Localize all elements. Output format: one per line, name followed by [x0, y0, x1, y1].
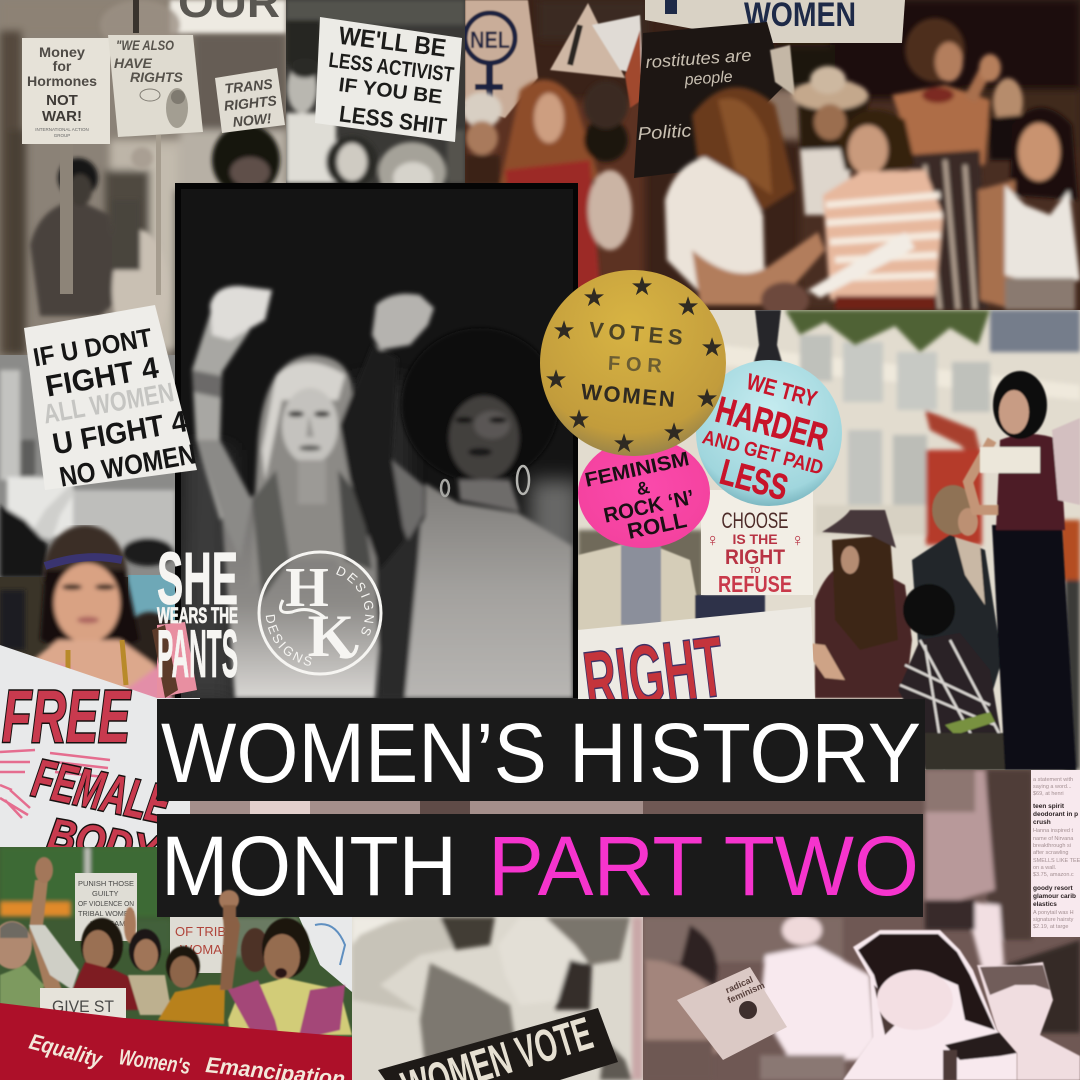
lit shoulder — [390, 458, 424, 540]
magazine text column: signature hairsty — [1033, 917, 1074, 923]
banner: women — [645, 0, 905, 43]
photo: rally with speaker (right) — [578, 310, 1080, 770]
badge: votes for women: WOMEN — [580, 379, 676, 412]
sign: we'll be less activist: WE'LL BE — [337, 22, 448, 63]
sign: choose is the right to refuse: RIGHT — [725, 546, 785, 569]
sign: money for hormones: WAR! — [42, 108, 82, 125]
magazine text column: teen spirit — [1033, 803, 1065, 810]
banner: NEL female symbol — [465, 0, 538, 118]
sign: punish those guilty: IN ASSAM — [90, 919, 125, 928]
sign: money for hormones: NOT — [46, 92, 78, 109]
badge: votes for women: ★ — [544, 364, 568, 394]
sign: if u dont fight 4 all women: NO WOMEN — [57, 438, 198, 493]
sign: punish those guilty: TRIBAL WOMEN — [78, 909, 134, 918]
sign: trans rights now: TRANS — [224, 76, 274, 97]
sign: we'll be less activist: IF YOU BE — [337, 74, 443, 109]
sign: of tribal woman: WOMAN — [180, 942, 231, 957]
woman in purple sari — [262, 918, 310, 978]
person in cream jacket — [578, 544, 698, 630]
left arm and sleeve — [192, 305, 250, 520]
sign: free female body: FEMALE — [28, 748, 176, 836]
right fist — [372, 294, 434, 350]
woman with red hair — [500, 80, 600, 185]
badge: votes for women: ★ — [695, 383, 719, 413]
title bar: women's history: WOMEN’S HISTORY — [161, 706, 921, 800]
sign: punish those guilty: OF VIOLENCE ON — [78, 899, 134, 908]
magazine text column: name of Nirvana — [1033, 836, 1074, 842]
magazine text column: after scrawling — [1033, 850, 1068, 856]
badge: votes for women — [540, 270, 726, 458]
hat woman — [798, 80, 870, 165]
woman in green sari — [0, 965, 44, 1010]
book: radical feminism — [677, 967, 787, 1060]
title bar: month part two: PART TWO — [488, 819, 919, 913]
cut-out: girl with microphone — [843, 930, 1017, 1080]
kneeling person in plaid — [898, 633, 1008, 770]
badge: feminism and rock n roll: & — [635, 477, 651, 499]
blonde face — [282, 388, 338, 464]
logo: HK designs: H — [285, 557, 329, 619]
sign: money for hormones — [22, 38, 110, 144]
blonde hair — [252, 352, 356, 563]
sign: money for hormones: Hormones — [27, 73, 97, 89]
sign: if u dont fight 4 all women: U FIGHT 4 — [50, 405, 190, 461]
sign: punish those guilty — [75, 873, 137, 941]
pink top and strap over frame — [152, 622, 197, 698]
badge: votes for women: ★ — [567, 404, 591, 434]
woman in dark red scarf — [81, 918, 123, 972]
sign: we also have rights: RIGHTS — [130, 69, 184, 85]
photo: activist crowd (top middle) — [286, 0, 465, 202]
photo: central raised fists portrait — [175, 183, 580, 700]
woman behind — [241, 928, 269, 972]
sign: prostitutes are people — [634, 22, 785, 178]
sign: we also have rights: HAVE — [114, 55, 153, 71]
dark right background — [1005, 940, 1080, 1033]
magazine text column: saying a word... — [1033, 784, 1072, 790]
sign: trans rights now: RIGHTS — [223, 92, 278, 114]
book: radical feminism: feminism — [726, 980, 766, 1005]
sign: money for hormones: GROUP — [54, 133, 70, 138]
photo: zine collage (bottom right) — [643, 770, 1080, 1080]
woman in yellow sari — [166, 946, 200, 986]
woman with hat far left — [462, 92, 502, 128]
logo: HK designs: DESIGNS — [336, 566, 374, 636]
sign: money for hormones: for — [53, 58, 72, 74]
right arm sleeve — [340, 345, 405, 570]
magazine text column: on a wall. — [1033, 865, 1057, 871]
magazine text column: glamour carib — [1033, 893, 1076, 900]
badge: we try harder and get paid less: LESS — [716, 451, 792, 508]
magazine text column: goody resort — [1033, 885, 1074, 892]
woman with glasses — [129, 929, 161, 971]
hat — [545, 917, 630, 965]
striped shirt woman — [838, 110, 915, 175]
woman in hat — [815, 560, 912, 698]
collage strip: cut-outs between title bars — [190, 801, 925, 815]
sign: of tribal woman — [170, 917, 235, 973]
cut-out: small figure — [977, 962, 1080, 1080]
sign: give st — [40, 988, 126, 1018]
sign: we'll be less activist: LESS ACTIVIST — [327, 49, 455, 87]
sign: trans rights now — [215, 68, 285, 133]
label: women vote — [378, 1007, 618, 1080]
photo: left protest background (mid left) — [0, 355, 180, 580]
sign: choose is the right to refuse: REFUSE — [718, 571, 792, 597]
sign: choose is the right to refuse: ♀ — [706, 530, 720, 550]
green waist pouch — [945, 712, 995, 735]
sign: blue drawing — [299, 917, 352, 992]
dress — [420, 963, 515, 1065]
sign: prostitutes are people: people — [683, 69, 733, 89]
skin arm — [645, 960, 725, 1058]
photo: woman with headband — [0, 525, 175, 705]
sign: choose is the right to refuse: ♀ — [791, 530, 804, 550]
sign: free female body — [0, 645, 200, 847]
red banner — [0, 1003, 352, 1080]
curly woman behind — [584, 118, 628, 162]
magazine text column: a statement with — [1033, 777, 1073, 783]
man in dark jacket — [912, 535, 1002, 700]
magazine text column: $3.75, amazon.c — [1033, 872, 1074, 878]
sign: trans rights now: NOW! — [232, 110, 273, 130]
raised arm woman — [892, 85, 990, 165]
leaves — [785, 310, 990, 352]
badge: feminism and rock n roll: ROLL — [625, 507, 689, 544]
raised fist over title bar — [219, 890, 239, 919]
banner: right: RIGHT — [579, 619, 729, 731]
sign: if u dont fight 4 all women: IF U DONT — [31, 322, 154, 372]
blonde woman background — [993, 78, 1023, 126]
badge: votes for women: VOTES — [588, 317, 684, 350]
badge: votes for women: ★ — [552, 315, 576, 345]
sign: we'll be less activist: LESS SHIT — [338, 100, 448, 139]
badge: votes for women: FOR — [607, 353, 663, 377]
badge: we try harder and get paid less — [696, 360, 842, 508]
right woman — [1010, 108, 1078, 200]
sign: we also have rights — [108, 35, 203, 137]
flag: triangle pennant — [550, 3, 625, 78]
magazine text column: deodorant in p — [1033, 811, 1078, 818]
logo: she wears the pants: SHE — [157, 537, 238, 620]
logo: she wears the pants — [157, 537, 238, 692]
sign: choose is the right to refuse: TO — [750, 566, 760, 575]
sign: choose is the right to refuse — [701, 490, 813, 597]
sign: punish those guilty: GUILTY — [92, 889, 119, 898]
photo: trans rights march (top left) — [0, 0, 286, 355]
sign: give st: GIVE ST — [52, 997, 114, 1016]
badge: votes for women: ★ — [582, 282, 606, 312]
right face — [449, 396, 519, 480]
badge: votes for women: ★ — [700, 332, 724, 362]
photo: 1970s women's march (top right) — [462, 0, 1080, 318]
sign: prostitutes are people: Politic — [637, 120, 692, 144]
magazine text column: Hanna inspired t — [1033, 828, 1074, 834]
photo: 1970s women's march (top right): NEL — [470, 27, 510, 54]
badge: we try harder and get paid less: HARDER — [712, 389, 832, 458]
left fist — [210, 286, 272, 340]
sign: prostitutes are people: rostitutes are — [645, 46, 752, 72]
lower left figure — [643, 1040, 713, 1080]
sign: free female body: BODY — [45, 809, 164, 877]
logo: HK designs: DESIGNS — [266, 614, 312, 666]
sign: if u dont fight 4 all women: FIGHT 4 — [43, 351, 161, 404]
sign: free female body: FREE — [2, 675, 132, 758]
sign: if u dont fight 4 all women: ALL WOMEN — [41, 377, 176, 430]
magazine text column: A ponytail was H — [1033, 910, 1074, 916]
photo: women vote poster (bottom middle) — [352, 917, 643, 1080]
magazine text column: breakthrough si — [1033, 843, 1071, 849]
sign: of tribal woman: OF TRIBA — [175, 924, 235, 939]
speaker woman — [992, 525, 1076, 770]
title bar: month part two — [157, 814, 923, 917]
logo: HK designs: K — [308, 603, 355, 669]
patterned wrap dress — [908, 150, 988, 310]
white shirt — [760, 945, 875, 1060]
book: radical feminism: radical — [724, 974, 754, 995]
badge: we try harder and get paid less: WE TRY — [744, 368, 820, 412]
long hair woman — [692, 87, 795, 212]
red banner: Equality — [27, 1029, 106, 1072]
sign: money for hormones: Money — [39, 44, 85, 60]
magazine text column — [1031, 770, 1080, 937]
sign: punish those guilty: PUNISH THOSE — [78, 879, 134, 888]
right body — [404, 483, 573, 698]
magazine text column: $69, at henri — [1033, 791, 1064, 797]
badge: feminism and rock n roll — [578, 438, 710, 550]
sign: we also have rights: "WE ALSO — [116, 37, 174, 53]
magazine text column: elastics — [1033, 901, 1057, 908]
badge: votes for women: ★ — [662, 417, 686, 447]
sign: choose is the right to refuse: IS THE — [732, 531, 778, 547]
logo: HK designs — [258, 550, 382, 676]
hoop earrings — [517, 466, 529, 494]
sign: we'll be less activist — [315, 17, 462, 142]
badge: votes for women: ★ — [676, 291, 700, 321]
logo: she wears the pants: WEARS THE — [157, 603, 238, 628]
lamp post — [754, 310, 782, 362]
sign: money for hormones: INTERNATIONAL ACTION — [35, 127, 89, 132]
sign: if u dont fight 4 all women — [24, 305, 198, 494]
left body — [222, 490, 385, 698]
magazine text column: $2.19, at targe — [1033, 924, 1068, 930]
photo: women march in India (bottom left) — [0, 847, 352, 1080]
badge: we try harder and get paid less: AND GET PAID — [700, 426, 825, 480]
badge: votes for women: ★ — [630, 271, 654, 301]
badge: feminism and rock n roll: ROCK ‘N’ — [602, 486, 696, 528]
sign: choose is the right to refuse: CHOOSE — [722, 508, 788, 533]
title bar: month part two: MONTH — [161, 819, 457, 913]
magazine text column: crush — [1033, 819, 1051, 826]
face — [498, 917, 585, 1005]
text: PANTS — [157, 616, 238, 692]
raised fist arm — [29, 880, 62, 990]
badge: feminism and rock n roll: FEMINISM — [583, 448, 691, 492]
badge: votes for women: ★ — [612, 428, 636, 458]
afro — [401, 328, 559, 482]
